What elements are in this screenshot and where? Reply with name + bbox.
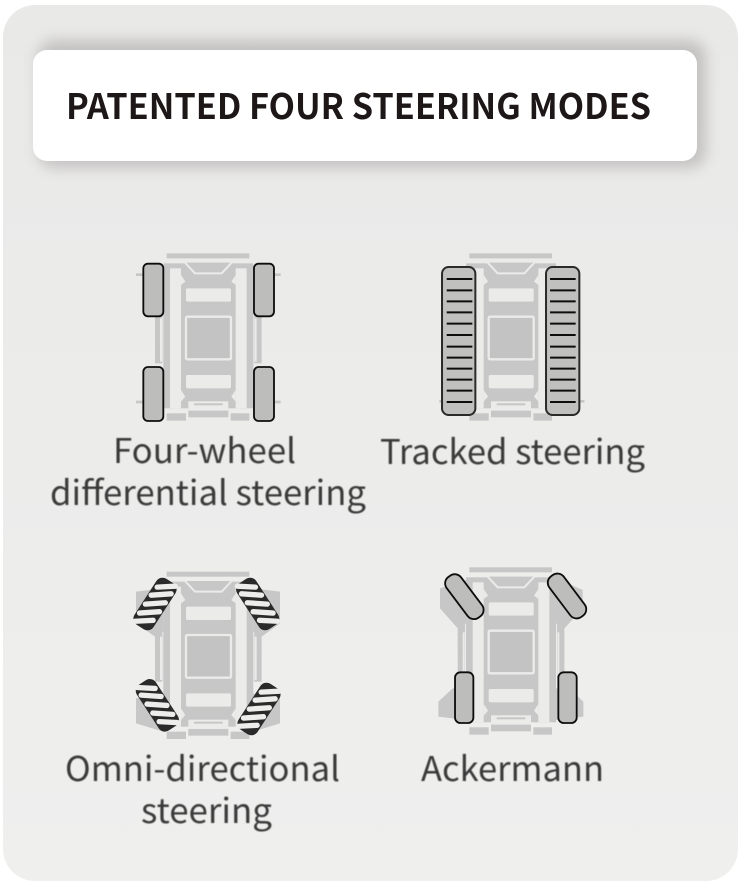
label: tracked steering: Tracked steering: [380, 425, 645, 474]
title card: [33, 40, 706, 168]
icon: four-wheel differential steering: [136, 253, 281, 421]
heading: PATENTED FOUR STEERING MODES: [66, 79, 651, 130]
label: omni-directional steering: steering: [141, 784, 272, 833]
label: four-wheel differential steering: differential steering: [50, 466, 366, 515]
label: four-wheel differential steering: Four-wheel: [113, 424, 296, 473]
label: ackermann steering: Ackermann: [421, 742, 604, 791]
icon: tracked steering: [439, 253, 584, 421]
icon: omni-directional steering: [131, 572, 283, 739]
label: omni-directional steering: [65, 742, 340, 833]
label: four-wheel differential steering: [50, 424, 366, 515]
icon: ackermann steering: [438, 567, 589, 735]
label: omni-directional steering: Omni-directional: [65, 742, 340, 791]
